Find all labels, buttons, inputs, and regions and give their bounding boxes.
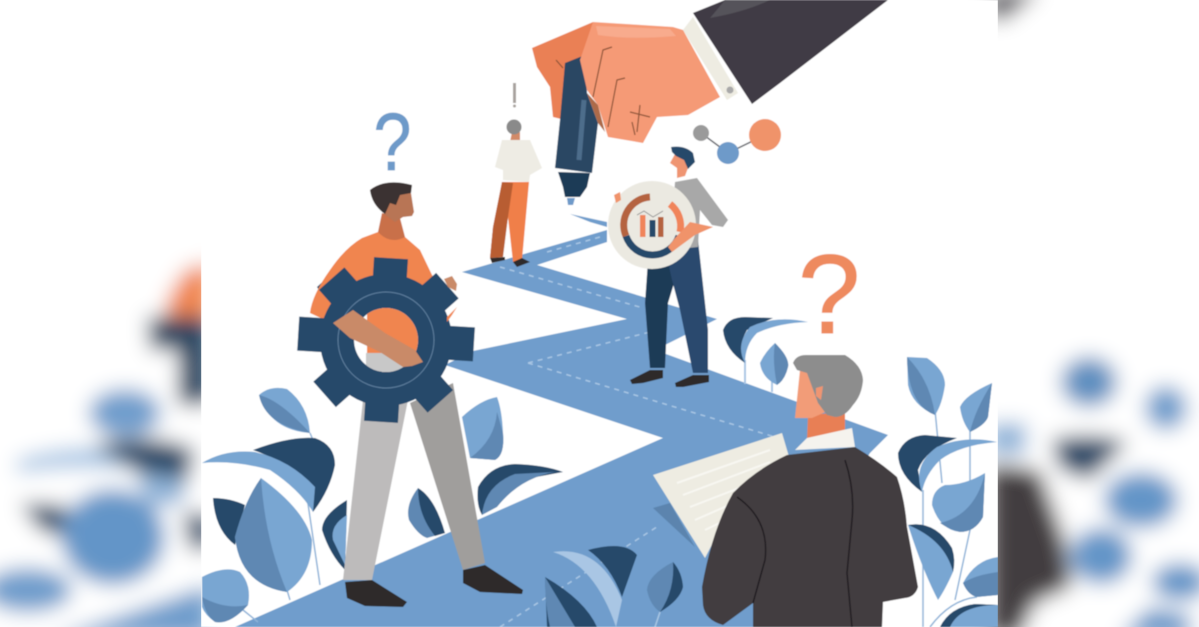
leaf: right of legs — [462, 397, 503, 460]
person: executive with document — [653, 355, 918, 627]
palm — [580, 22, 720, 143]
icon: orange question mark: ? — [798, 232, 860, 357]
icon: chart disc — [608, 181, 696, 269]
sleeve — [693, 0, 888, 104]
head — [384, 192, 414, 222]
leaf: dark small — [213, 498, 245, 545]
icon: connected nodes — [693, 119, 781, 164]
plant: left cluster — [202, 388, 563, 622]
collar — [795, 428, 855, 450]
leaf: dark large — [253, 438, 335, 512]
neck and face — [807, 412, 845, 440]
trousers — [410, 383, 485, 570]
shoes — [345, 580, 407, 607]
cuff — [683, 17, 738, 100]
icon: gear — [293, 253, 479, 427]
leaf: light arc — [202, 451, 315, 512]
leaf: large centre — [235, 478, 312, 592]
leaf: top — [259, 388, 310, 433]
person: man with gear — [293, 96, 523, 607]
back arm — [316, 282, 322, 290]
panel: blurred left margin — [0, 0, 210, 627]
leaf: dark arc — [898, 435, 957, 492]
leaf: bottom left — [202, 569, 249, 622]
leaf: middle — [932, 473, 985, 532]
person: man with chart disc — [608, 147, 728, 387]
question mark: blue: ? — [374, 96, 411, 187]
shirt — [310, 232, 434, 319]
panel: central artwork — [201, 0, 998, 627]
plant: bottom centre cluster — [545, 546, 683, 627]
leaf: behind legs — [322, 500, 347, 570]
hand holding marker — [532, 0, 888, 205]
fingers behind marker — [532, 22, 600, 120]
leaf: lower — [908, 525, 954, 600]
hair — [793, 355, 863, 417]
winding road — [235, 214, 888, 627]
suit — [702, 447, 918, 627]
arms — [333, 310, 423, 367]
trousers — [644, 265, 674, 368]
panel: blurred right margin — [990, 0, 1199, 627]
torso and sleeve — [670, 178, 728, 250]
plant: top right cluster — [723, 317, 808, 392]
person: man looking away with exclamation — [490, 83, 542, 267]
exclamation mark — [513, 83, 516, 103]
leaf: top — [907, 357, 945, 415]
marker — [555, 55, 598, 173]
document — [653, 503, 695, 547]
plant: right cluster — [898, 357, 998, 627]
shoes — [630, 370, 663, 384]
